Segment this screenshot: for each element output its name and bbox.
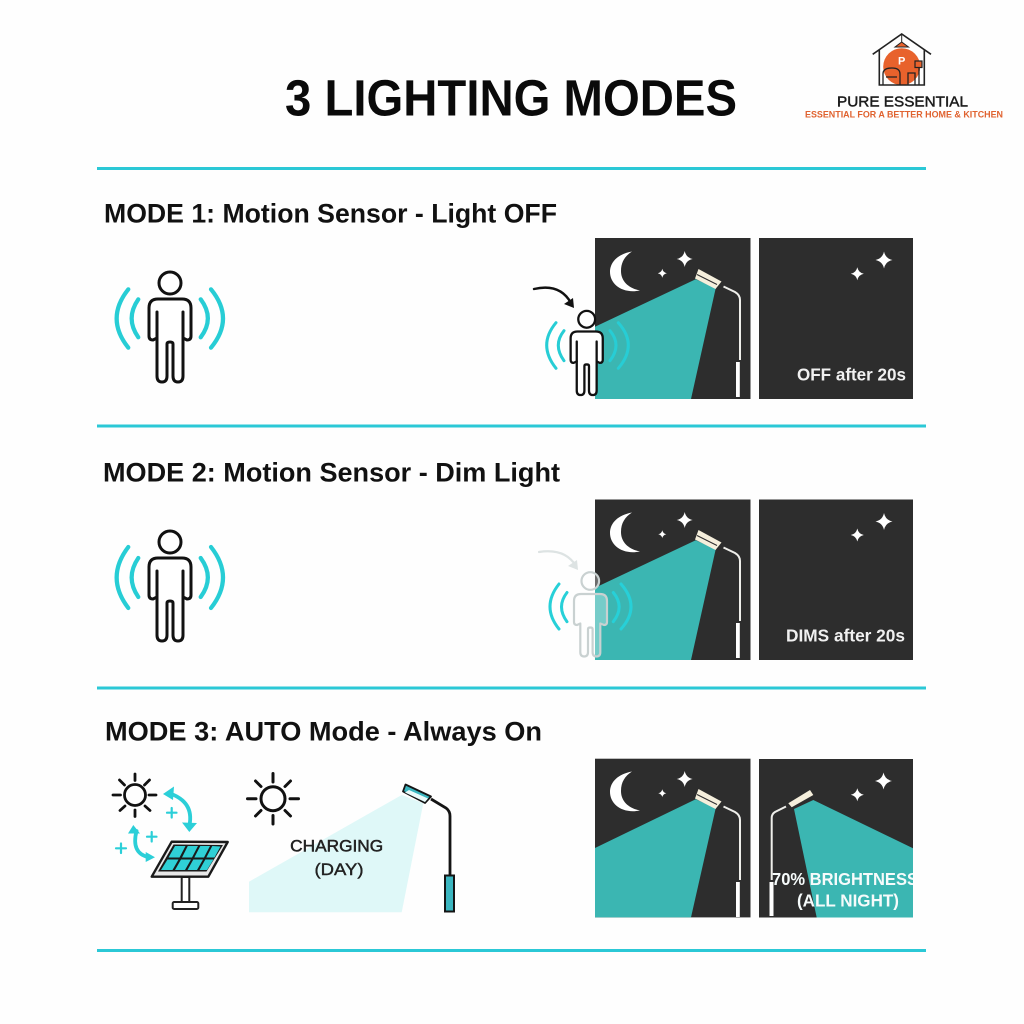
panel: mode 3 — [105, 716, 918, 918]
icon: solar panel — [152, 842, 228, 909]
night scene: light on — [595, 759, 750, 917]
icon: person with motion waves — [117, 272, 223, 382]
heading: mode 2: MODE 2: Motion Sensor - Dim Light — [103, 458, 560, 488]
title: 3 LIGHTING MODES — [285, 70, 737, 126]
arrow: faded — [539, 551, 578, 570]
icon: charging arrows — [116, 786, 197, 862]
night scene: off after 20s: OFF after 20s — [797, 365, 906, 385]
night scene: light on — [595, 500, 750, 660]
icon: small person with waves — [547, 311, 628, 395]
charging scene: pale beam, sun and lamp — [248, 774, 454, 912]
logo tagline: ESSENTIAL FOR A BETTER HOME & KITCHEN — [805, 108, 1003, 120]
logo: Pure Essential — [805, 34, 1003, 120]
arrow: approaching person — [534, 288, 574, 308]
icon: sun — [113, 774, 156, 816]
night scene: off after 20s — [759, 238, 913, 399]
night scene: dims after 20s: DIMS after 20s — [786, 626, 905, 646]
heading: mode 1: MODE 1: Motion Sensor - Light OFF — [104, 198, 557, 228]
panel: mode 2 — [103, 458, 913, 660]
icon: person with motion waves — [117, 531, 223, 641]
heading: mode 3: MODE 3: AUTO Mode - Always On — [105, 716, 542, 746]
label: charging: CHARGING — [290, 837, 383, 856]
night scene: light on — [595, 238, 750, 399]
logo name: PURE ESSENTIAL — [837, 94, 968, 110]
night scene: 70% brightness all night: (ALL NIGHT) — [797, 891, 899, 911]
night scene: 70% brightness all night: 70% BRIGHTNESS — [772, 869, 918, 889]
icon: faded person with waves — [550, 572, 631, 656]
label: day: (DAY) — [314, 860, 364, 879]
night scene: 70% brightness all night — [759, 759, 918, 918]
icon: street lamp — [403, 784, 454, 912]
logo icon: house — [873, 34, 931, 85]
logo icon: house: P — [898, 56, 905, 68]
panel: mode 1 — [104, 198, 913, 399]
night scene: dims after 20s — [759, 500, 913, 660]
icon: sun — [248, 774, 298, 824]
